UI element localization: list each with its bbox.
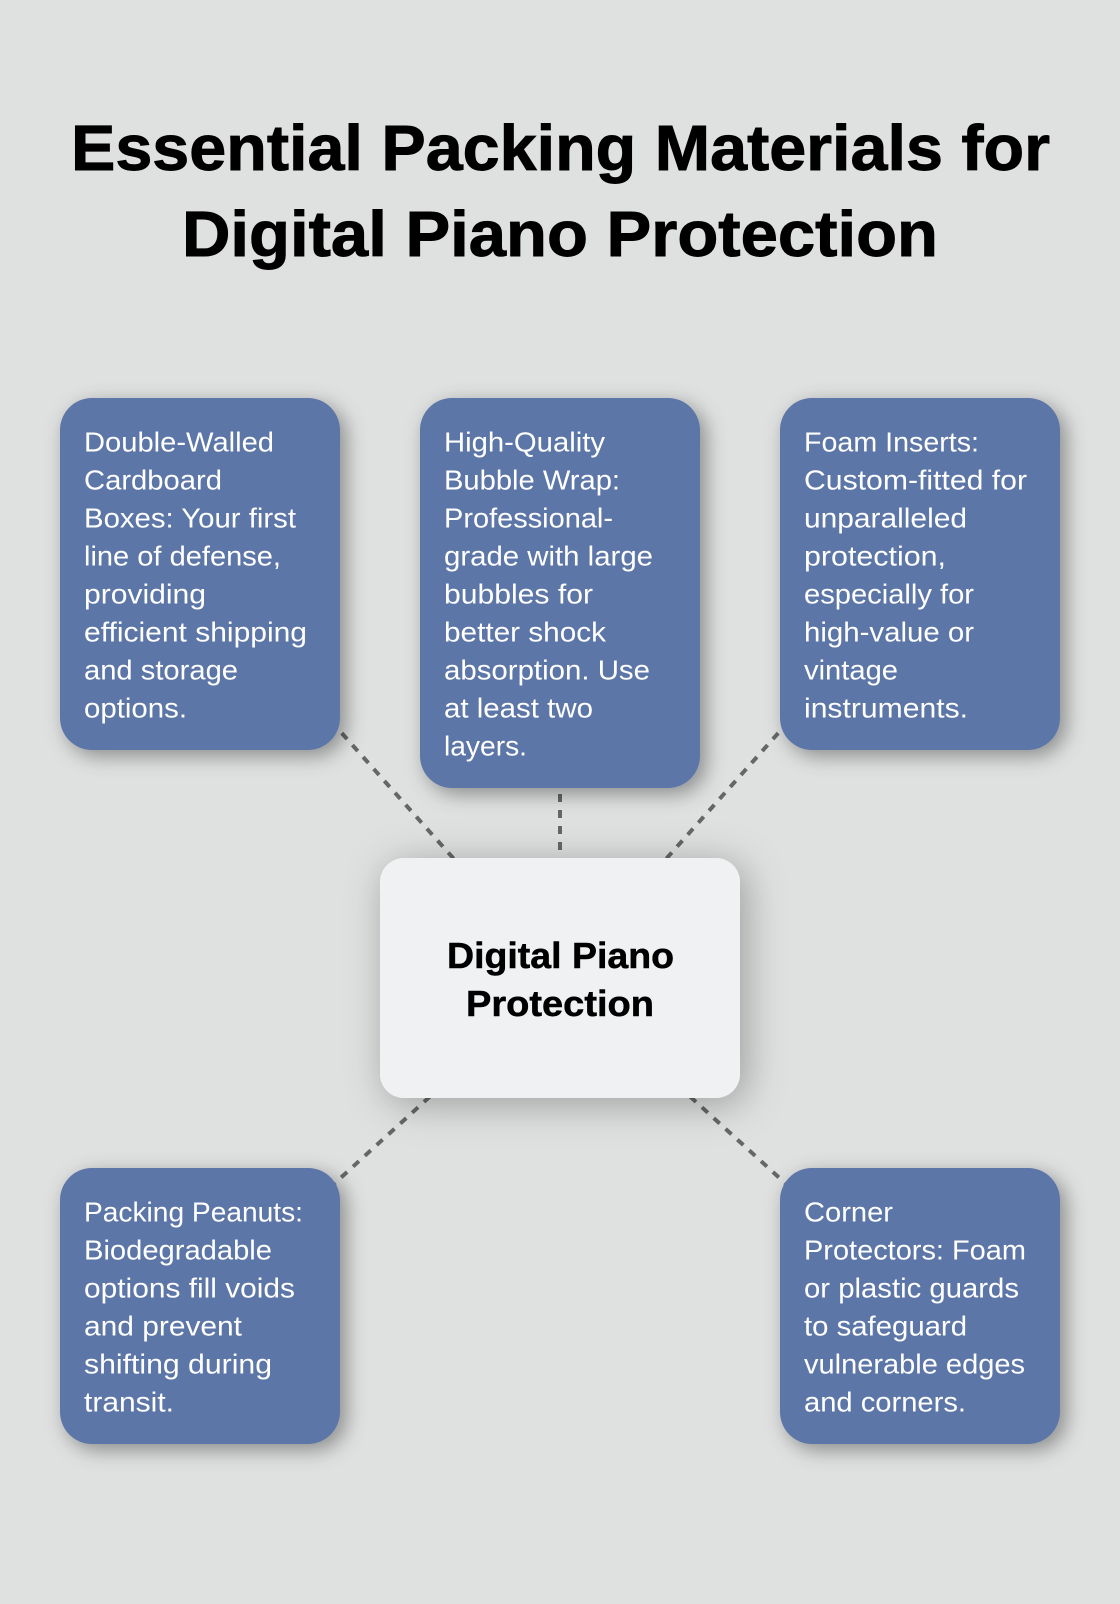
panel: corner protectors: or plastic guards <box>804 1272 1019 1304</box>
panel: foam inserts: Foam Inserts: <box>804 426 979 458</box>
panel: double-walled cardboard boxes: efficient shipping <box>84 616 307 648</box>
panel: packing peanuts: Packing Peanuts: <box>84 1196 303 1228</box>
panel: high-quality bubble wrap <box>420 398 700 788</box>
panel: high-quality bubble wrap: grade with large <box>444 540 653 572</box>
panel: high-quality bubble wrap: absorption. Use <box>444 654 650 686</box>
panel: foam inserts: Custom-fitted for <box>804 464 1027 496</box>
panel: high-quality bubble wrap: at least two <box>444 692 593 724</box>
panel: corner protectors: to safeguard <box>804 1310 967 1342</box>
panel: foam inserts: especially for <box>804 578 974 610</box>
panel: double-walled cardboard boxes: options. <box>84 692 187 724</box>
title: Essential Packing Materials for <box>71 112 1050 184</box>
panel: foam inserts: vintage <box>804 654 898 686</box>
panel: double-walled cardboard boxes <box>60 398 340 750</box>
panel: double-walled cardboard boxes: Double-Walled <box>84 426 274 458</box>
panel: high-quality bubble wrap: better shock <box>444 616 607 648</box>
panel: double-walled cardboard boxes: and storage <box>84 654 238 686</box>
panel: packing peanuts: shifting during <box>84 1348 272 1380</box>
panel: double-walled cardboard boxes: Boxes: Your first <box>84 502 296 534</box>
panel: corner protectors: Corner <box>804 1196 893 1228</box>
panel: packing peanuts: transit. <box>84 1386 174 1418</box>
panel: foam inserts: unparalleled <box>804 502 967 534</box>
panel: corner protectors: vulnerable edges <box>804 1348 1025 1380</box>
panel: double-walled cardboard boxes: providing <box>84 578 206 610</box>
title: Digital Piano Protection <box>182 198 938 270</box>
panel: digital piano protection centre: Digital Piano <box>447 935 674 976</box>
panel: foam inserts: protection, <box>804 540 946 572</box>
panel: packing peanuts: Biodegradable <box>84 1234 272 1266</box>
panel: high-quality bubble wrap: bubbles for <box>444 578 593 610</box>
panel: double-walled cardboard boxes: Cardboard <box>84 464 222 496</box>
panel: foam inserts: instruments. <box>804 692 968 724</box>
title <box>71 112 1050 270</box>
panel: corner protectors: and corners. <box>804 1386 966 1418</box>
panel: packing peanuts: and prevent <box>84 1310 242 1342</box>
panel: foam inserts: high-value or <box>804 616 974 648</box>
panel: high-quality bubble wrap: High-Quality <box>444 426 605 458</box>
connector lines <box>200 574 920 1306</box>
panel: corner protectors <box>780 1168 1060 1444</box>
panel: digital piano protection centre: Protection <box>466 983 654 1024</box>
panel: corner protectors: Protectors: Foam <box>804 1234 1026 1266</box>
panel: packing peanuts: options fill voids <box>84 1272 295 1304</box>
panel: high-quality bubble wrap: Professional- <box>444 502 613 534</box>
panel: double-walled cardboard boxes: line of defense, <box>84 540 281 572</box>
panel: high-quality bubble wrap: Bubble Wrap: <box>444 464 620 496</box>
panel: digital piano protection centre <box>380 858 740 1098</box>
panel: foam inserts <box>780 398 1060 750</box>
panel: packing peanuts <box>60 1168 340 1444</box>
panel: high-quality bubble wrap: layers. <box>444 730 527 762</box>
